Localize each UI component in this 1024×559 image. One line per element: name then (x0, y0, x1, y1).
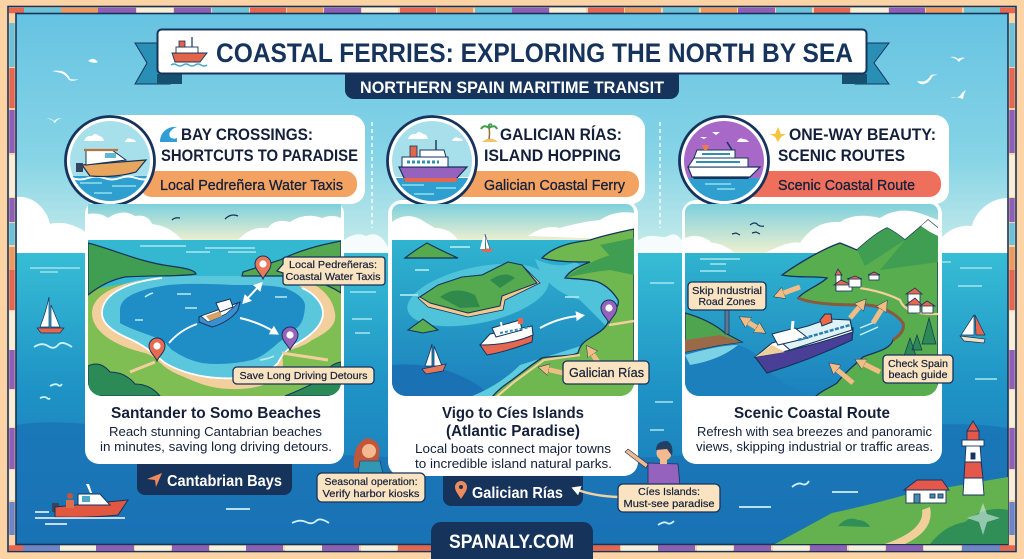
ribbon fold: right (842, 74, 867, 84)
village (834, 269, 935, 313)
coast landscape (775, 477, 1008, 544)
pill: scenic route (740, 171, 941, 197)
heading: ONE-WAY BEAUTY: (789, 125, 936, 144)
callout: beach guide (883, 355, 953, 383)
icon: red motor boat (35, 484, 128, 524)
pin: orange (255, 256, 271, 279)
subtitle band: NORTHERN SPAIN MARITIME TRANSIT (360, 78, 665, 97)
callout: beach guide: Check Spain (888, 358, 948, 370)
pin: purple (282, 327, 298, 350)
callout: seasonal operation: Seasonal operation: (324, 476, 418, 488)
lower card (682, 200, 942, 464)
pill: local water taxis (140, 171, 357, 197)
callout: water taxis (277, 257, 385, 285)
text: scenic coastal route: Refresh with sea breezes and panoramic (697, 424, 932, 439)
callout: water taxis: Local Pedreñeras: (289, 259, 377, 271)
tag: Cantabrian Bays (137, 464, 292, 495)
cruise ship (755, 314, 878, 373)
icon: sparkles (770, 127, 786, 142)
text: Santander to Somo: Santander to Somo Beaches (111, 405, 321, 422)
callout: skip industrial (688, 282, 766, 310)
text: Santander to Somo (100, 405, 332, 454)
heading (161, 125, 358, 165)
icon: lighthouse (962, 421, 984, 495)
birds in sky (46, 57, 966, 123)
icon: sailboat left (37, 297, 64, 333)
icon: sailboat right (960, 315, 985, 343)
icon: palm island (481, 124, 498, 142)
text: Vigo to Cíes: to incredible island natural parks. (415, 456, 612, 471)
panel: bay crossings (66, 115, 385, 464)
text: Vigo to Cíes (415, 405, 612, 471)
panel: Galician Rías (388, 115, 649, 476)
heading: SCENIC ROUTES (778, 146, 905, 165)
badge: water taxi (66, 116, 154, 206)
panel: one-way beauty (680, 115, 953, 464)
text: Santander to Somo: in minutes, saving long driving detours. (100, 439, 332, 454)
map: Santander bay (88, 204, 341, 396)
icon: coastal house (904, 480, 949, 503)
header card (422, 115, 645, 204)
pin: red (149, 338, 165, 361)
figure: woman (354, 438, 383, 474)
text: Santander to Somo: Reach stunning Cantabrian beaches (109, 424, 323, 439)
heading (484, 125, 622, 165)
text: scenic coastal route: views, skipping industrial or traffic areas. (696, 439, 933, 454)
title banner (135, 30, 889, 99)
pill: coastal ferry (450, 171, 639, 197)
route arrow (540, 316, 578, 328)
text: Vigo to Cíes: Local boats connect major towns (415, 441, 612, 456)
arrows (746, 287, 883, 383)
callout: Cíes Islands (618, 484, 720, 512)
heading (778, 125, 936, 165)
heading: SHORTCUTS TO PARADISE (161, 146, 358, 165)
footer: website (431, 522, 593, 559)
map: scenic route (685, 204, 938, 397)
callout: seasonal operation: Verify harbor kiosks (322, 488, 420, 500)
heading: ISLAND HOPPING (484, 146, 621, 165)
ribbon: right (855, 43, 889, 84)
callout: Cíes Islands: Must-see paradise (624, 498, 715, 510)
callout: Galician Rías: Galician Rías (569, 365, 644, 380)
pin: purple (601, 300, 617, 323)
callout: seasonal operation (317, 473, 425, 502)
map: Cíes Islands (392, 204, 634, 399)
subtitle band (345, 72, 679, 99)
callout: Cíes Islands: Cíes Islands: (638, 486, 700, 498)
route arrows (169, 287, 273, 343)
text: scenic coastal route (696, 405, 933, 454)
lower card (85, 200, 344, 464)
text: Vigo to Cíes: Vigo to Cíes Islands (442, 405, 584, 422)
callout: driving detours (233, 367, 374, 384)
badge: coastal ferry (388, 116, 476, 206)
title text: COASTAL FERRIES: EXPLORING THE NORTH BY SEA (216, 38, 853, 68)
water taxi boat (199, 299, 240, 327)
callout: skip industrial: Skip Industrial (692, 285, 762, 297)
pill: scenic route: Scenic Coastal Route (778, 177, 915, 194)
callout: water taxis: Coastal Water Taxis (286, 271, 380, 283)
sailboat (480, 234, 493, 252)
callout: Galician Rías (563, 361, 649, 384)
sign post (725, 310, 729, 334)
pill: local water taxis: Local Pedreñera Water Taxis (160, 177, 343, 194)
header card (100, 115, 365, 204)
text: Vigo to Cíes: (Atlantic Paradise) (446, 423, 580, 440)
tag: Cantabrian Bays: Cantabrian Bays (167, 473, 282, 490)
ribbon fold: left (157, 74, 182, 84)
icon: wave (160, 127, 177, 142)
sailboat (422, 344, 446, 374)
callout: skip industrial: Road Zones (698, 296, 756, 308)
tag: Galician Rías: Galician Rías (472, 485, 563, 502)
header card (714, 115, 949, 204)
icon: ferry (171, 37, 207, 66)
figure: pointing man (625, 441, 680, 486)
trees (904, 318, 936, 356)
pill: coastal ferry: Galician Coastal Ferry (484, 177, 625, 194)
callout: driving detours: Save Long Driving Detours (240, 370, 368, 382)
tag: Galician Rías (443, 476, 583, 506)
callout: beach guide: beach guide (888, 369, 948, 381)
footer: website: SPANALY.COM (449, 532, 574, 553)
arrow to Galician tag (578, 490, 618, 497)
title box (158, 30, 866, 74)
ribbon: left (135, 43, 170, 84)
dashed dividers (372, 122, 660, 228)
ferry (480, 318, 533, 355)
badge: cruise ship (680, 116, 768, 206)
heading: GALICIAN RÍAS: (500, 125, 622, 144)
heading: BAY CROSSINGS: (181, 125, 313, 144)
lower card (388, 200, 638, 476)
arrows (546, 352, 598, 373)
text: scenic coastal route: Scenic Coastal Route (734, 405, 890, 422)
